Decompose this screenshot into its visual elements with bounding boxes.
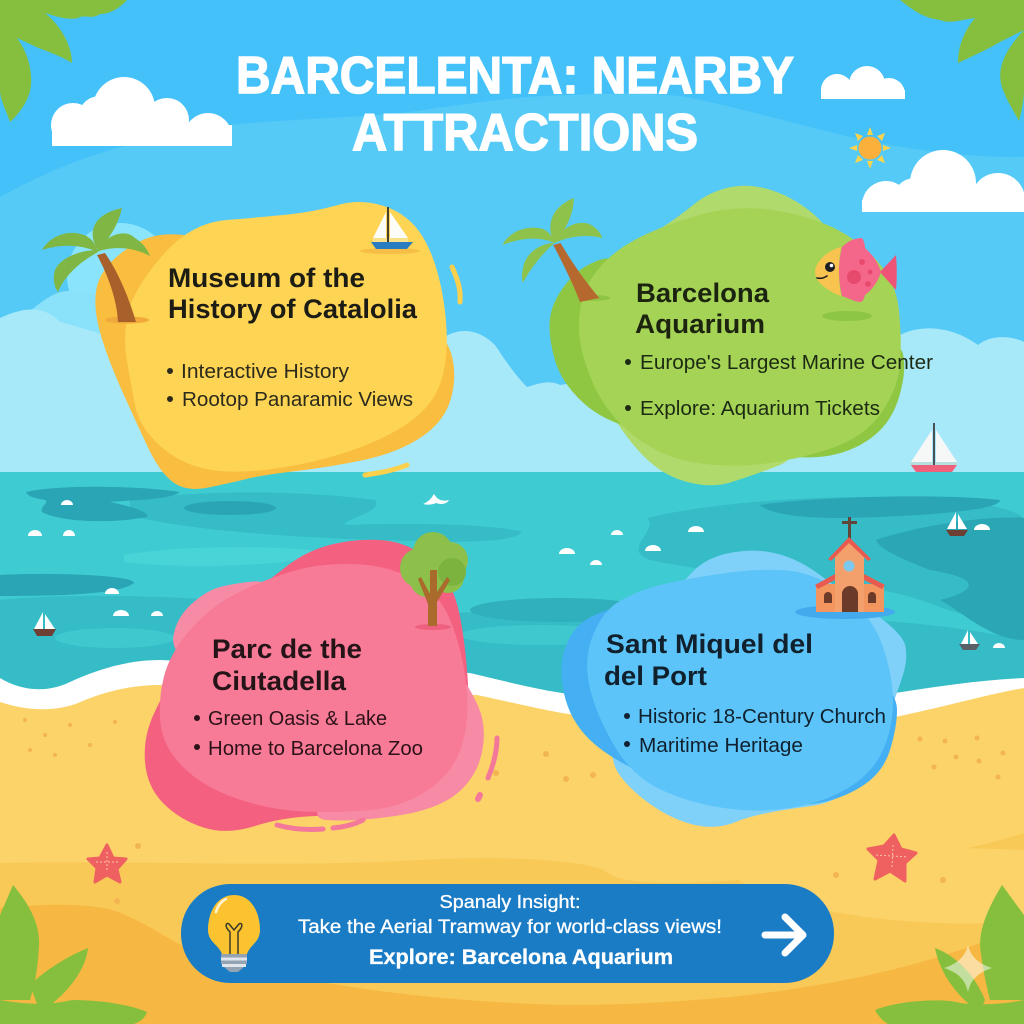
bullet list: Explore: Aquarium Tickets [640,397,880,420]
bullet list: Green Oasis & Lake [208,707,387,730]
heading: Aquarium [635,309,765,339]
bullet list: Home to Barcelona Zoo [208,737,423,760]
heading: History of Catalolia [168,294,418,324]
callout text: Take the Aerial Tramway for world-class views! [298,917,722,938]
icon: small boat right lower [959,630,980,650]
bullet list: Interactive History [181,360,350,383]
icon: sailboat [360,207,420,254]
heading: Museum of the [168,263,365,293]
heading: Ciutadella [212,666,347,696]
heading: Barcelona [636,278,770,308]
title: ATTRACTIONS [352,104,698,162]
background: sea [0,472,1024,712]
title: BARCELENTA: NEARBY [236,47,794,105]
callout text: Explore: Barcelona Aquarium [369,946,673,969]
palm leaves: bottom right corner [875,885,1024,1024]
icon: church [795,517,895,619]
title [236,47,794,162]
whitecaps [28,494,1005,648]
bullet list [624,705,886,757]
heading [212,634,362,696]
icon: starfish right [868,835,916,881]
panel: Parc de the Ciutadella [145,532,497,831]
cloud: top left [51,77,232,146]
bullet list: Historic 18-Century Church [638,705,886,728]
heading [635,278,770,339]
panel: Museum of the History of Catalolia [42,202,460,489]
background: sky [0,0,1024,480]
panel: Sant Miquel del del Port [561,517,906,827]
icon: light bulb [208,895,260,972]
icon: arrow [765,917,803,953]
bullet list: Europe's Largest Marine Center [640,351,933,374]
heading [168,263,418,324]
sparkle [944,945,992,992]
icon: sailboat right [911,423,957,472]
heading [604,629,813,691]
bullet list [625,351,933,420]
background: sand beach [0,660,1024,1024]
cloud: right [862,150,1024,212]
icon: small boat left [33,612,56,636]
callout text [298,892,722,969]
heading: Parc de the [212,634,362,664]
icon: small boat right [946,512,968,536]
icon: palm tree [42,208,150,324]
callout text: Spanaly Insight: [440,892,580,912]
bullet list: Rootop Panaramic Views [182,388,413,411]
bullet list [167,360,413,411]
heading: Sant Miquel del [606,629,813,659]
cloud: top right small [821,66,905,99]
icon: palm tree [502,198,611,302]
icon: sun [849,127,891,169]
panel: Barcelona Aquarium [502,186,933,485]
bullet list: Maritime Heritage [639,734,803,757]
callout: insight banner [181,884,834,983]
icon: tree [400,532,468,630]
heading: del Port [604,661,707,691]
palm leaves: top left corner [0,0,127,122]
palm leaves: top right corner [900,0,1024,121]
bullet list [194,707,423,760]
icon: starfish left [88,845,126,882]
icon: fish [815,238,897,321]
palm leaves: bottom left corner [0,885,147,1024]
